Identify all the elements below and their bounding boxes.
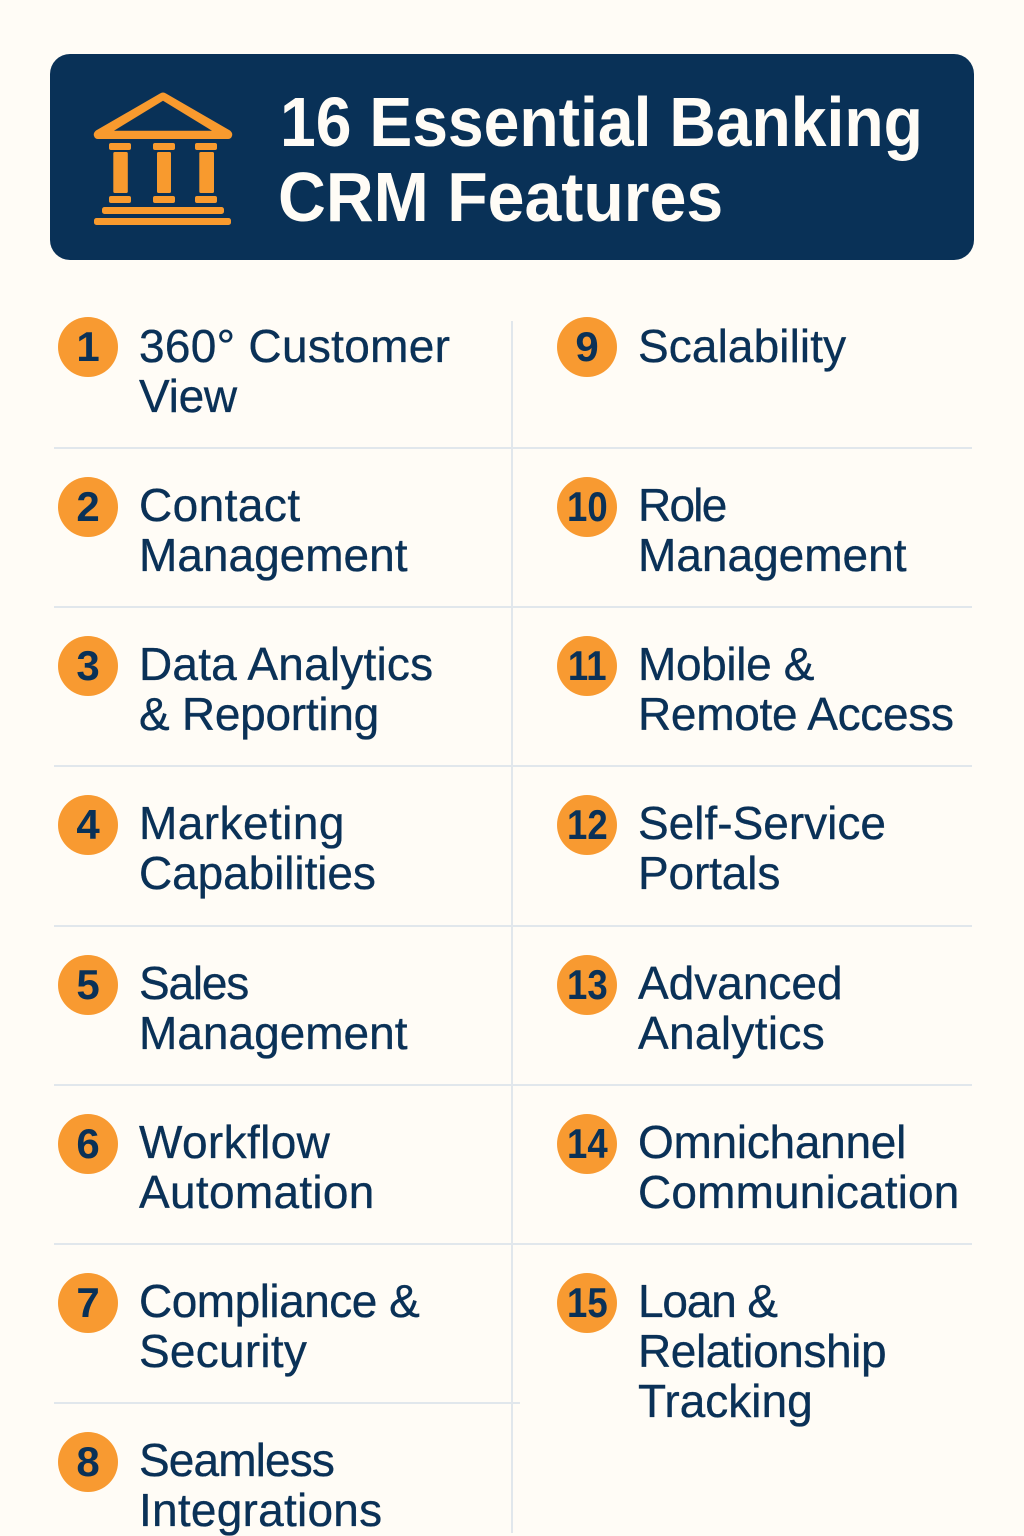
- text: 7: [76, 1279, 100, 1326]
- text: Analytics: [638, 1007, 825, 1059]
- item 12: [557, 795, 886, 899]
- text: Communication: [638, 1166, 960, 1218]
- text: Automation: [139, 1166, 375, 1218]
- text: Sales: [139, 957, 248, 1009]
- text: 11: [568, 642, 606, 689]
- text: Seamless: [139, 1434, 334, 1486]
- text: 6: [76, 1120, 100, 1167]
- text: Capabilities: [139, 847, 376, 899]
- text: Management: [139, 1007, 408, 1059]
- item 1: [58, 317, 450, 422]
- text: Advanced: [638, 957, 843, 1009]
- text: Self-Service: [638, 797, 886, 849]
- item 4: [58, 795, 376, 899]
- text: 360° Customer: [139, 320, 450, 372]
- text: 2: [76, 483, 100, 530]
- text: 1: [76, 323, 100, 370]
- item 7: [58, 1273, 420, 1377]
- text: Management: [638, 529, 906, 581]
- column divider: [511, 321, 513, 1533]
- text: View: [139, 370, 237, 422]
- text: Compliance &: [139, 1275, 419, 1327]
- text: 5: [76, 961, 100, 1008]
- text: Integrations: [139, 1484, 382, 1536]
- text: Management: [139, 529, 408, 581]
- text: Security: [139, 1325, 307, 1377]
- item 3: [58, 636, 433, 740]
- text: 4: [76, 801, 100, 848]
- text: 12: [567, 801, 607, 848]
- text: Scalability: [638, 320, 846, 372]
- text: 15: [567, 1279, 607, 1326]
- text: Tracking: [638, 1375, 813, 1427]
- title: [278, 82, 923, 236]
- text: Remote Access: [638, 688, 954, 740]
- text: Relationship: [638, 1325, 886, 1377]
- item 5: [58, 955, 408, 1059]
- item 13: [557, 955, 843, 1059]
- text: Omnichannel: [638, 1116, 906, 1168]
- item 6: [58, 1114, 375, 1218]
- text: 14: [567, 1120, 607, 1167]
- text: Portals: [638, 847, 780, 899]
- item 11: [557, 636, 954, 740]
- text: 3: [76, 642, 100, 689]
- text: Role: [638, 479, 726, 531]
- text: 8: [76, 1438, 100, 1485]
- text: Mobile &: [638, 638, 814, 690]
- text: Contact: [139, 479, 301, 531]
- item 2: [58, 477, 408, 581]
- item 15: [557, 1273, 886, 1427]
- text: Loan &: [638, 1275, 777, 1327]
- text: Workflow: [139, 1116, 330, 1168]
- header banner: [50, 54, 974, 260]
- text: 10: [567, 483, 607, 530]
- item 14: [557, 1114, 960, 1218]
- text: 13: [567, 961, 607, 1008]
- title: CRM Features: [278, 158, 723, 236]
- title: 16 Essential Banking: [280, 82, 923, 160]
- text: & Reporting: [139, 688, 379, 740]
- text: 9: [575, 323, 599, 370]
- item 10: [557, 477, 906, 581]
- text: Marketing: [139, 797, 345, 849]
- item 8: [58, 1432, 382, 1536]
- text: Data Analytics: [139, 638, 433, 690]
- icon: bank building: [94, 92, 232, 225]
- item 9: [557, 317, 846, 377]
